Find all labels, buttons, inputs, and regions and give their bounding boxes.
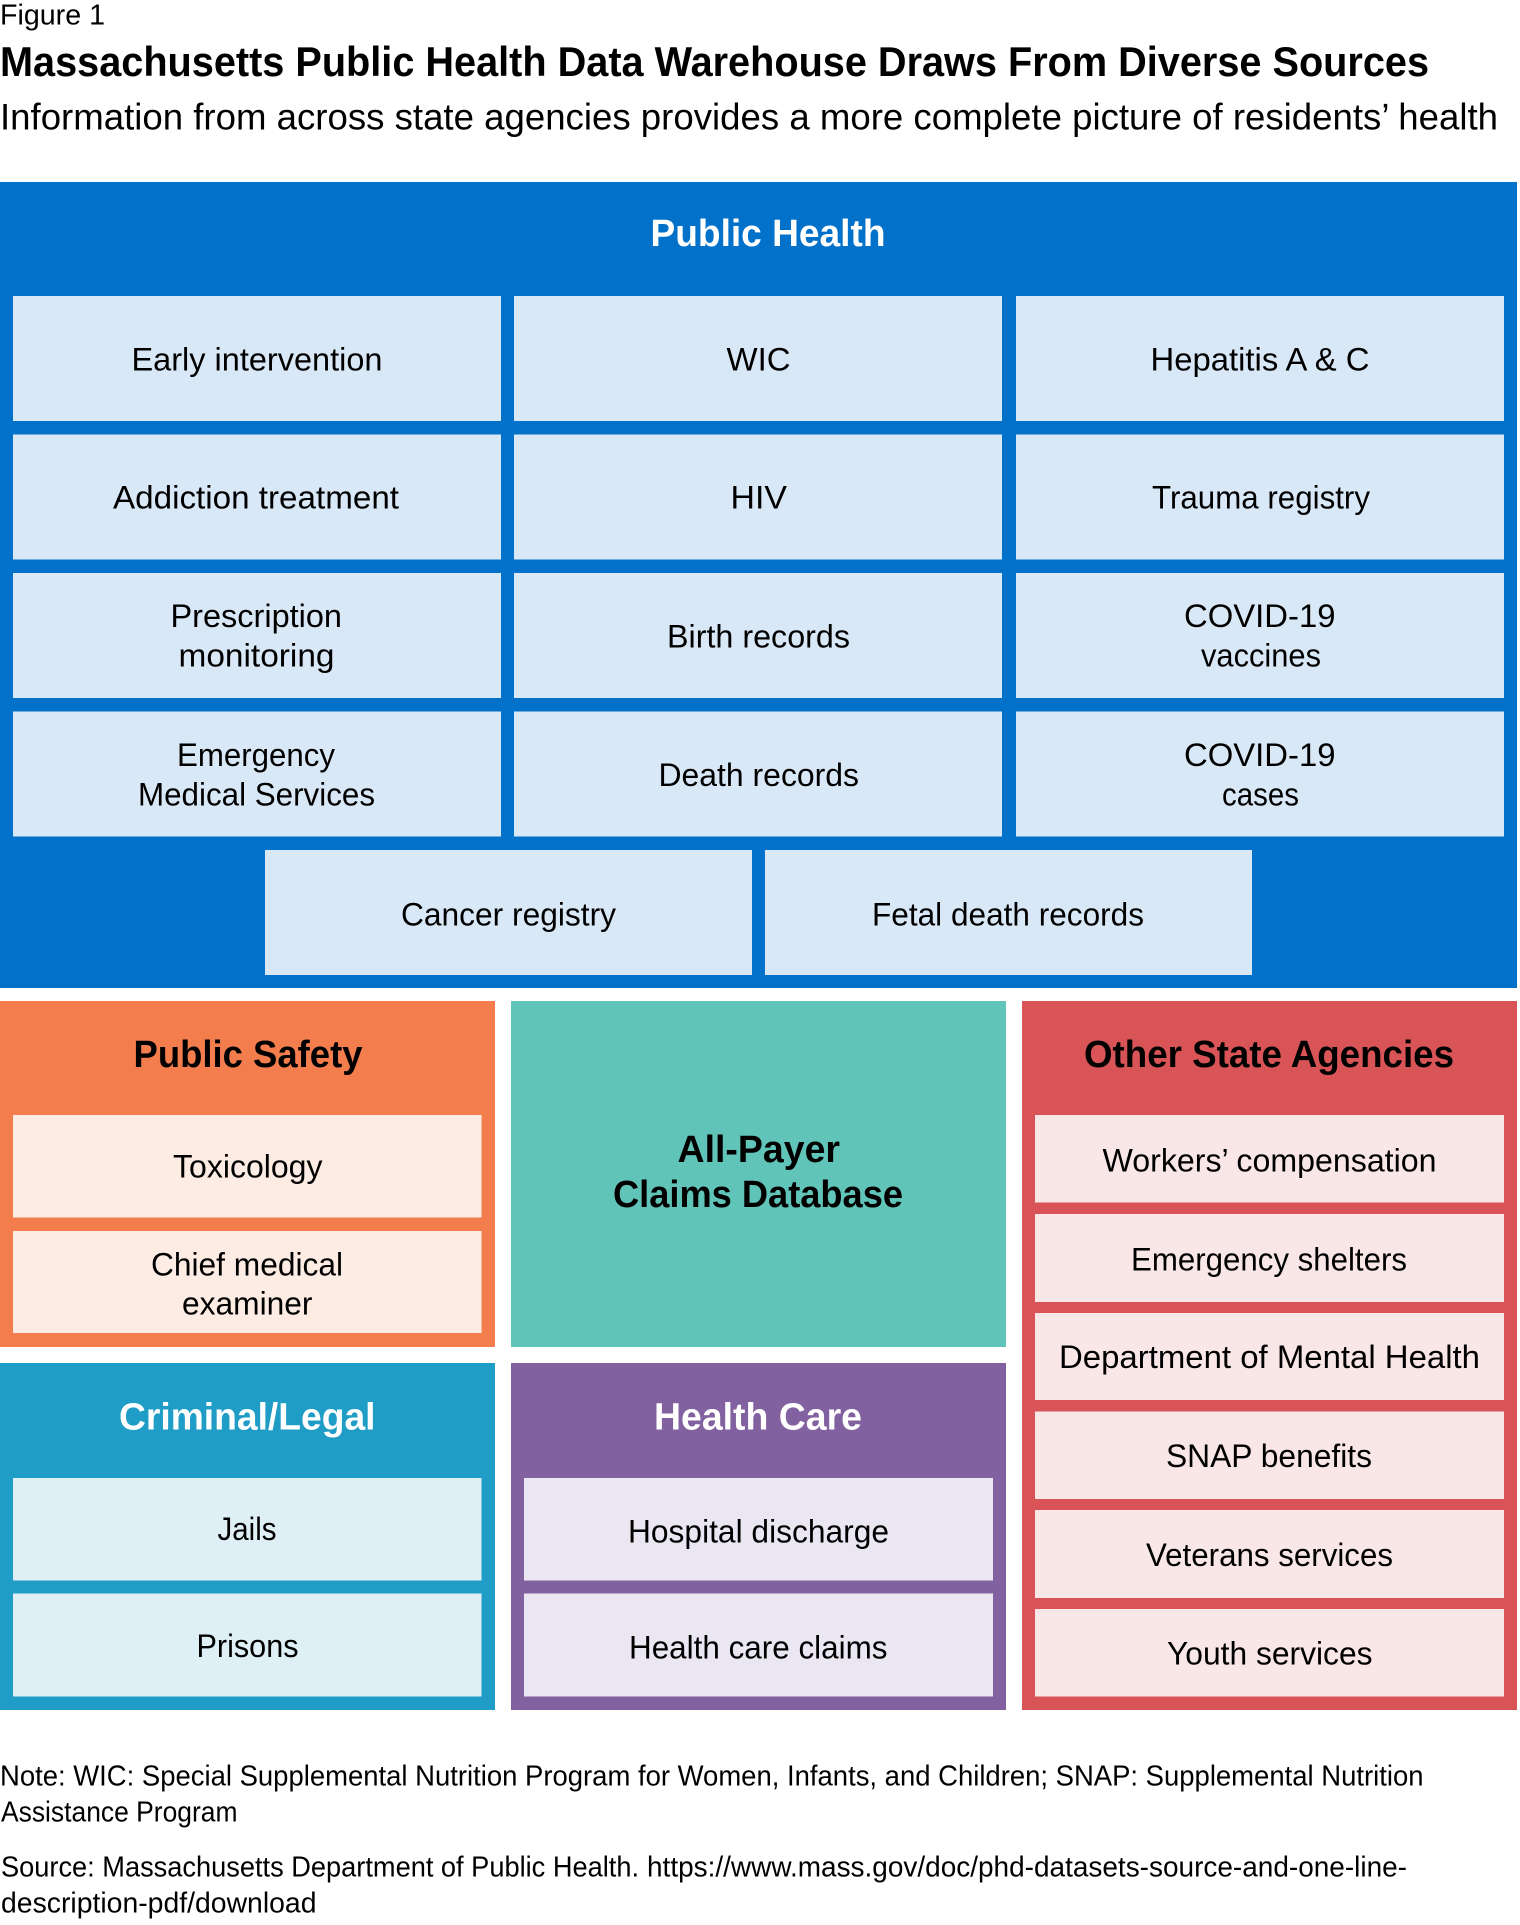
item: hospital discharge xyxy=(524,1478,993,1580)
heading: criminal/legal: Criminal/Legal xyxy=(119,1396,376,1438)
item: fetal death records xyxy=(765,850,1252,975)
item: addiction treatment xyxy=(13,434,501,560)
source xyxy=(1,1852,1407,1920)
item: toxicology: Toxicology xyxy=(173,1148,322,1184)
item: department of mental health xyxy=(1035,1313,1504,1400)
item: chief medical examiner: examiner xyxy=(182,1286,313,1322)
subtitle: Information from across state agencies provides a more complete picture of residents’ health xyxy=(0,96,1498,138)
item: emergency shelters: Emergency shelters xyxy=(1131,1242,1407,1278)
item: jails xyxy=(13,1478,482,1580)
item: chief medical examiner: Chief medical xyxy=(151,1246,343,1282)
item: early intervention: Early intervention xyxy=(132,342,382,378)
item: emergency medical services: Emergency xyxy=(177,737,335,773)
panel: public safety xyxy=(0,1001,495,1347)
panel: all-payer claims database xyxy=(511,1001,1006,1347)
panel: health care xyxy=(511,1363,1006,1710)
item: covid-19 vaccines xyxy=(1016,573,1504,698)
item: toxicology xyxy=(13,1115,482,1218)
item: hospital discharge: Hospital discharge xyxy=(628,1514,889,1550)
title: Massachusetts Public Health Data Warehouse Draws From Diverse Sources xyxy=(0,38,1429,85)
note: Assistance Program xyxy=(1,1796,238,1828)
heading: public safety: Public Safety xyxy=(134,1034,362,1076)
item: HIV xyxy=(514,434,1002,560)
heading: other state agencies: Other State Agencies xyxy=(1084,1034,1454,1076)
item: veterans services xyxy=(1035,1510,1504,1598)
item: youth services: Youth services xyxy=(1167,1636,1372,1672)
item: cancer registry: Cancer registry xyxy=(401,896,616,932)
panel: public health xyxy=(0,182,1517,988)
item: snap benefits xyxy=(1035,1412,1504,1499)
item: WIC xyxy=(514,296,1002,421)
item: emergency medical services xyxy=(13,712,501,836)
item: addiction treatment: Addiction treatment xyxy=(113,480,399,516)
note xyxy=(0,1760,1424,1828)
source: https://www.mass.gov/doc/phd-datasets-source-and-one-line- xyxy=(647,1852,1407,1884)
item: youth services xyxy=(1035,1609,1504,1696)
source: Source: Massachusetts Department of Public Health. xyxy=(1,1852,639,1884)
figure label: Figure 1 xyxy=(0,0,105,32)
item: cancer registry xyxy=(265,850,752,975)
item: workers compensation xyxy=(1035,1115,1504,1202)
item: department of mental health: Department of Mental Health xyxy=(1059,1339,1480,1375)
item: health care claims xyxy=(524,1594,993,1696)
item: prescription monitoring: monitoring xyxy=(178,638,334,674)
item: covid-19 cases xyxy=(1016,712,1504,836)
item: HIV: HIV xyxy=(730,480,788,516)
item: death records xyxy=(514,712,1002,836)
heading: health care: Health Care xyxy=(654,1396,862,1438)
item: birth records xyxy=(514,573,1002,698)
item: prisons xyxy=(13,1594,482,1696)
source: description-pdf/download xyxy=(1,1888,316,1920)
heading: public health: Public Health xyxy=(650,213,886,255)
item: hepatitis: Hepatitis A & C xyxy=(1150,342,1370,378)
item: workers compensation: Workers’ compensation xyxy=(1102,1142,1436,1178)
panel: all-payer claims database: Claims Database xyxy=(613,1174,903,1216)
item: covid-19 vaccines: vaccines xyxy=(1201,638,1321,674)
item: covid-19 vaccines: COVID-19 xyxy=(1184,598,1336,634)
panel: all-payer claims database: All-Payer xyxy=(678,1129,840,1171)
item: jails: Jails xyxy=(218,1511,276,1547)
item: trauma registry: Trauma registry xyxy=(1152,480,1370,516)
item: prescription monitoring xyxy=(13,573,501,698)
item: prescription monitoring: Prescription xyxy=(170,598,342,634)
item: fetal death records: Fetal death records xyxy=(872,896,1144,932)
item: chief medical examiner xyxy=(13,1231,482,1333)
panel: other state agencies xyxy=(1022,1001,1517,1710)
item: covid-19 cases: COVID-19 xyxy=(1184,737,1336,773)
item: death records: Death records xyxy=(658,757,859,793)
item: health care claims: Health care claims xyxy=(629,1630,888,1666)
item: trauma registry xyxy=(1016,434,1504,560)
note: Note: WIC: Special Supplemental Nutrition Program for Women, Infants, and Children; SNAP: Supplemental Nutrition xyxy=(0,1760,1424,1792)
item: veterans services: Veterans services xyxy=(1146,1537,1393,1573)
item: covid-19 cases: cases xyxy=(1222,776,1299,812)
item: emergency medical services: Medical Services xyxy=(138,776,375,812)
item: snap benefits: SNAP benefits xyxy=(1166,1438,1372,1474)
item: birth records: Birth records xyxy=(667,618,850,654)
item: early intervention xyxy=(13,296,501,421)
item: emergency shelters xyxy=(1035,1214,1504,1302)
panel: criminal/legal xyxy=(0,1363,495,1710)
item: WIC: WIC xyxy=(726,342,790,378)
item: prisons: Prisons xyxy=(196,1628,298,1664)
item: hepatitis xyxy=(1016,296,1504,421)
